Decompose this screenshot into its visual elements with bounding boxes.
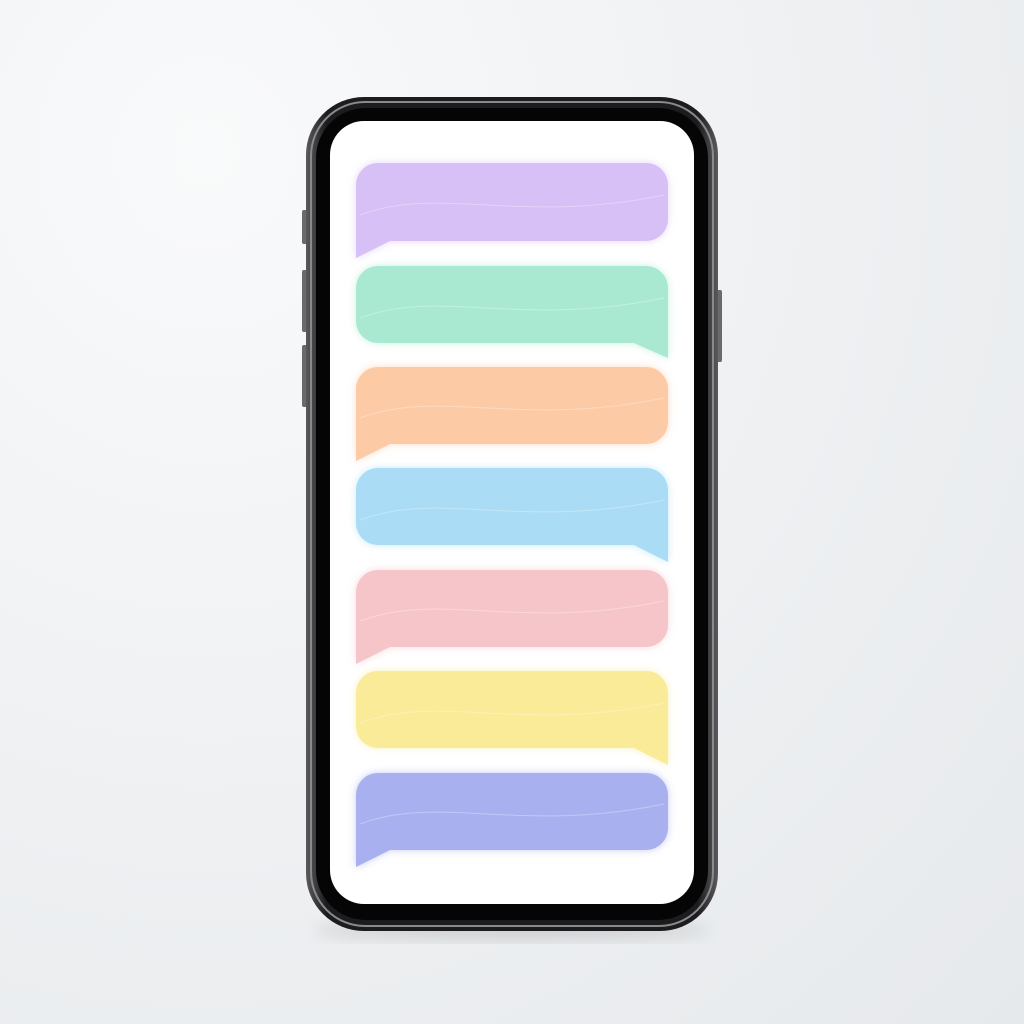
bubble 5: pink, tail left [356,570,668,664]
phone shadow [312,920,712,940]
phone body [302,97,722,931]
bubble 7: periwinkle, tail left [356,773,668,867]
screen [330,121,694,904]
bubble 2: mint, tail right [356,266,668,358]
side buttons [302,210,308,244]
bubble 3: peach, tail left [356,367,668,461]
bubble 1: purple, tail left [356,163,668,258]
bubble 4: blue, tail right [356,468,668,562]
bubble 6: yellow, tail right [356,671,668,765]
